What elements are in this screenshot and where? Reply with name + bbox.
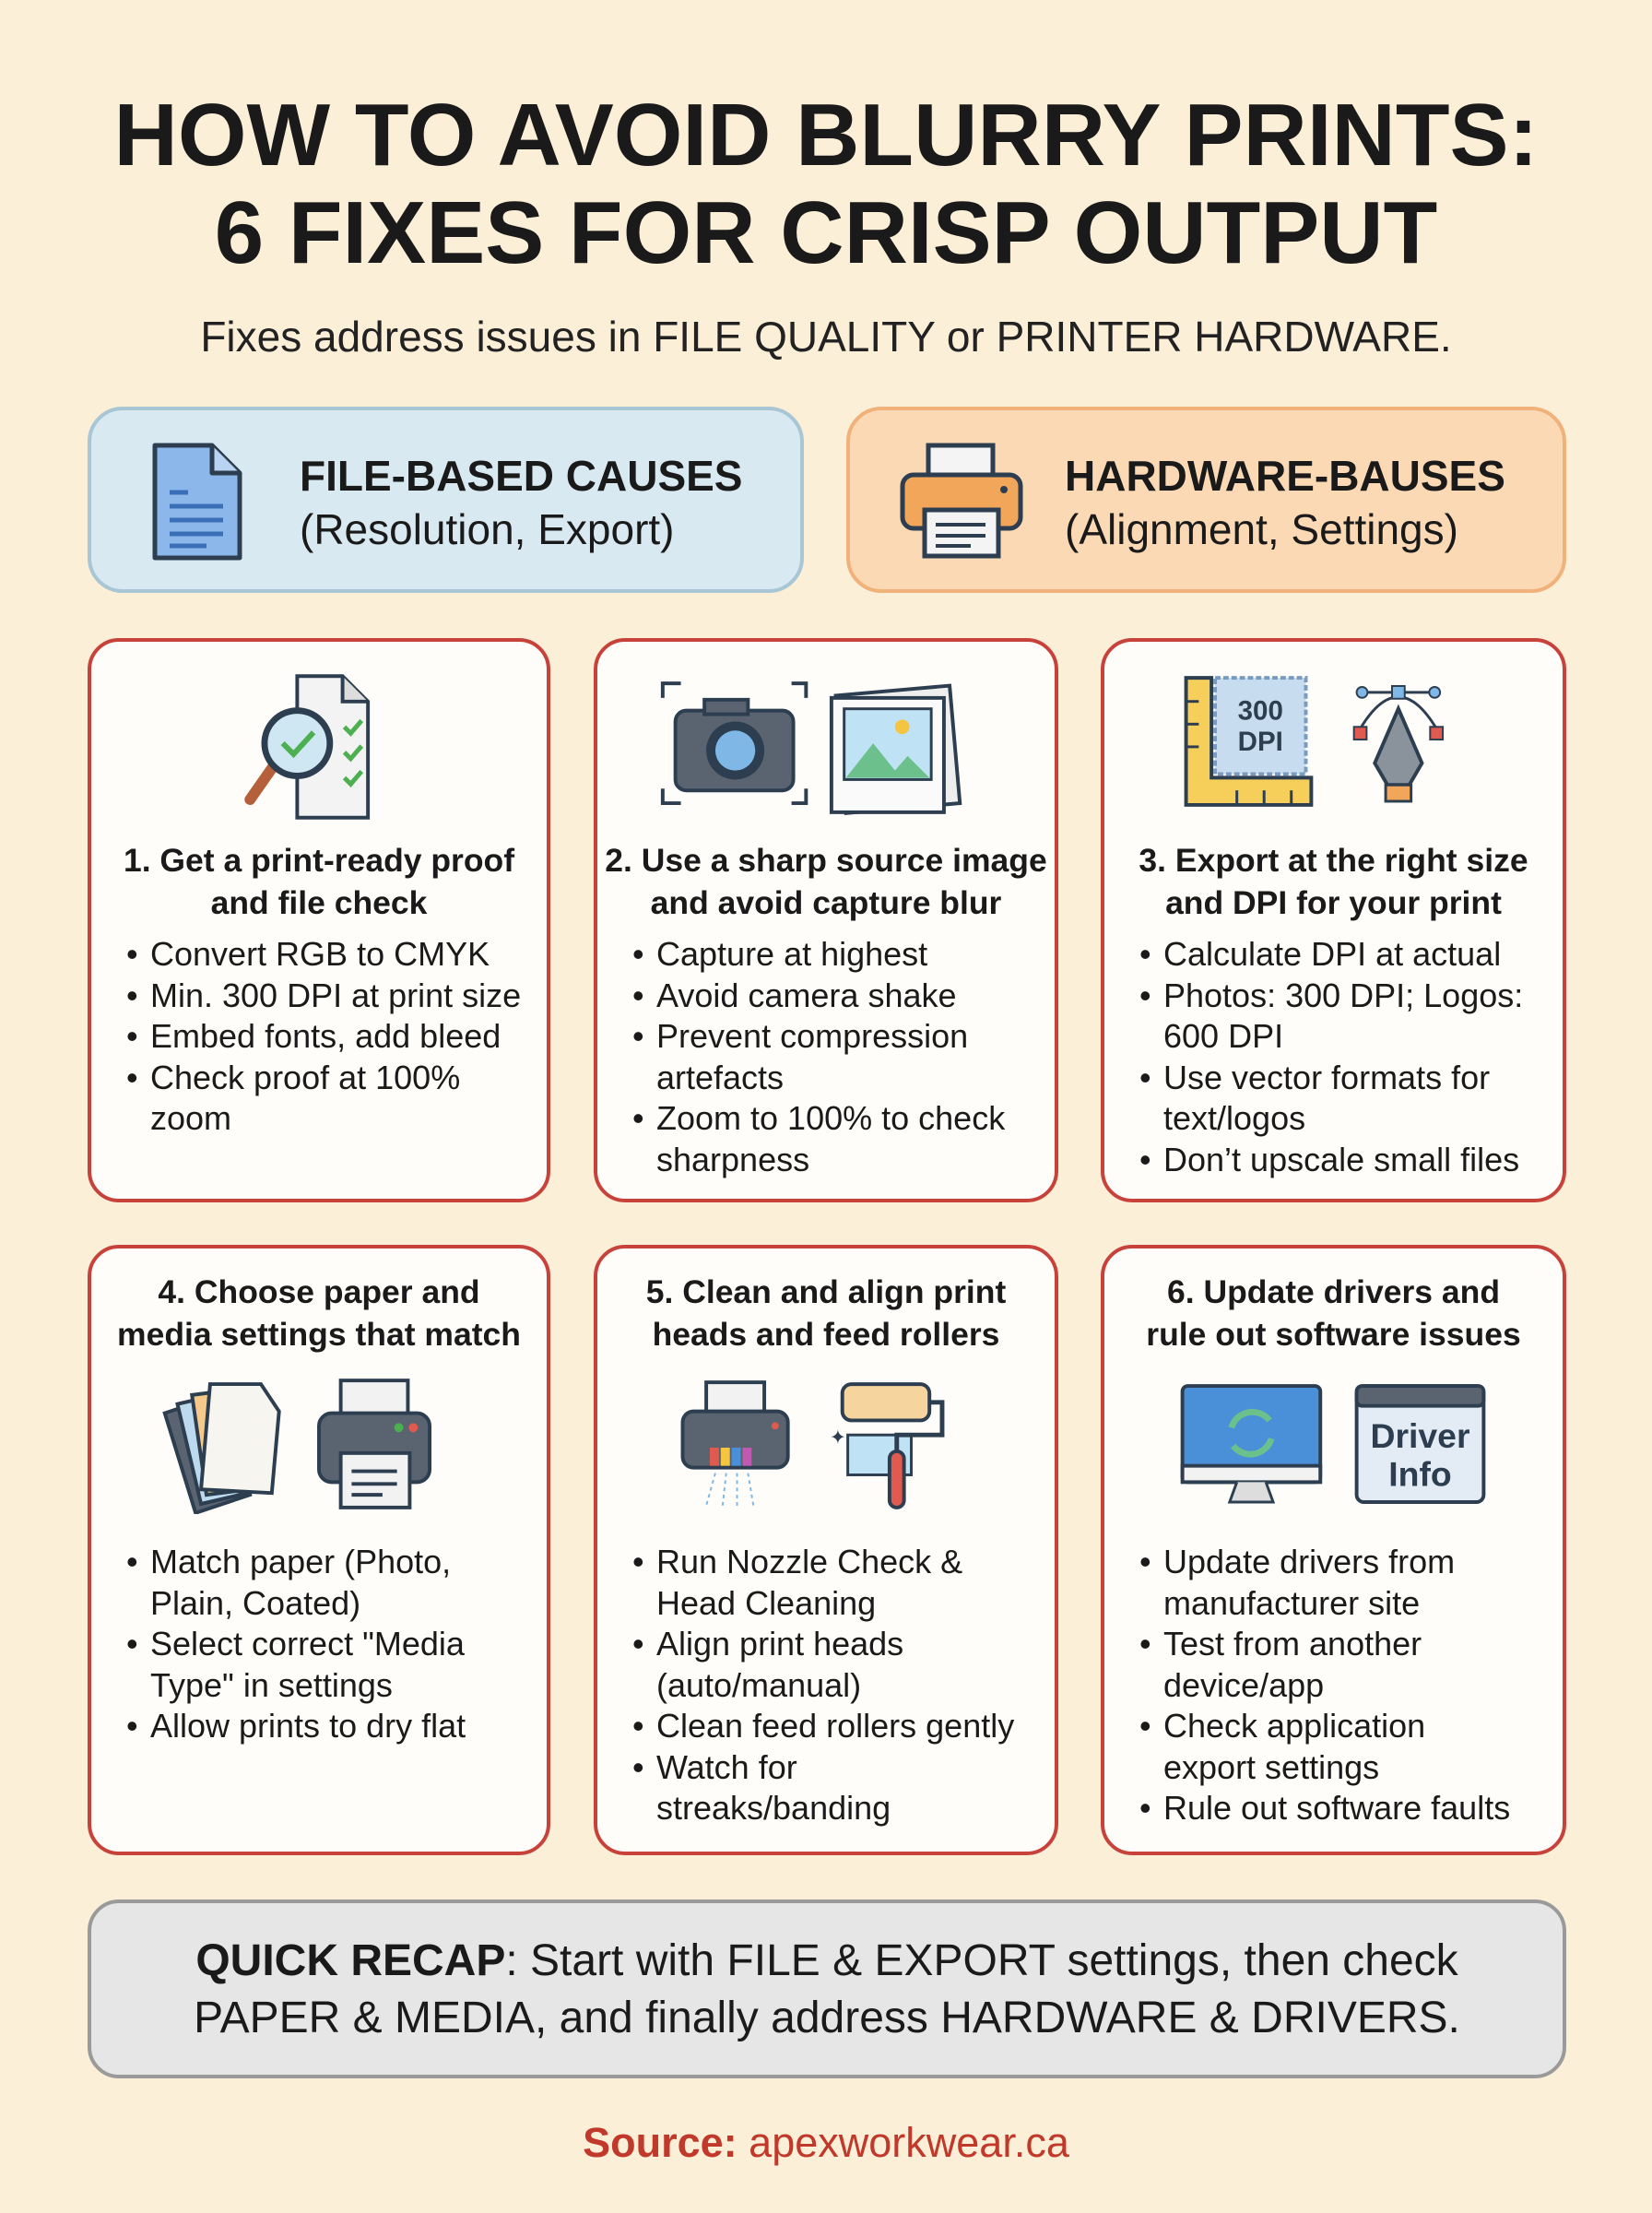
panel: card 1 bbox=[88, 638, 550, 1202]
subheading: (Alignment, Settings) bbox=[1065, 505, 1458, 553]
heading bbox=[1139, 842, 1528, 921]
bullets bbox=[633, 935, 1005, 1178]
bullets bbox=[127, 1543, 466, 1745]
icon: monitor and driver info bbox=[1180, 1384, 1486, 1504]
bullets: Select correct "Media bbox=[150, 1625, 465, 1663]
bullets: (auto/manual) bbox=[656, 1665, 861, 1704]
heading: 2. Use a sharp source image bbox=[605, 842, 1047, 879]
title bbox=[114, 86, 1538, 282]
bullets: Check application bbox=[1163, 1707, 1425, 1745]
heading: 1. Get a print-ready proof bbox=[124, 842, 514, 879]
panel: card 2 bbox=[594, 638, 1058, 1202]
bullets: Use vector formats for bbox=[1163, 1059, 1490, 1095]
title: 6 FIXES FOR CRISP OUTPUT bbox=[215, 183, 1437, 282]
bullets: sharpness bbox=[656, 1140, 809, 1178]
bullets bbox=[127, 935, 521, 1137]
bullets: Clean feed rollers gently bbox=[656, 1707, 1014, 1745]
bullets: Watch for bbox=[656, 1748, 797, 1785]
heading: and file check bbox=[211, 884, 427, 921]
heading bbox=[117, 1273, 521, 1353]
bullets bbox=[633, 1543, 1014, 1827]
bullets: Type" in settings bbox=[150, 1665, 393, 1704]
panel: card 4 bbox=[88, 1245, 550, 1855]
panel: file-based causes bbox=[88, 407, 804, 593]
heading: 5. Clean and align print bbox=[646, 1273, 1006, 1310]
bullets: Allow prints to dry flat bbox=[150, 1707, 466, 1745]
icon: printer heads and roller bbox=[680, 1380, 944, 1509]
bullets: Avoid camera shake bbox=[656, 976, 957, 1014]
title: HOW TO AVOID BLURRY PRINTS: bbox=[114, 86, 1538, 184]
icon: camera and photo bbox=[660, 681, 962, 815]
bullets: Convert RGB to CMYK bbox=[150, 935, 490, 973]
icon: paper stack and printer bbox=[162, 1379, 431, 1514]
bullets: Don’t upscale small files bbox=[1163, 1140, 1519, 1178]
bullets: export settings bbox=[1163, 1748, 1379, 1785]
heading: and avoid capture blur bbox=[651, 884, 1001, 921]
bullets: streaks/banding bbox=[656, 1789, 891, 1827]
heading: FILE-BASED CAUSES bbox=[300, 452, 742, 500]
bullets: zoom bbox=[150, 1099, 231, 1137]
bullets: Zoom to 100% to check bbox=[656, 1099, 1005, 1137]
heading: heads and feed rollers bbox=[653, 1316, 999, 1353]
callout: quick recap: PAPER & MEDIA, and finally address HARDWARE & DRIVERS. bbox=[194, 1994, 1460, 2042]
heading: rule out software issues bbox=[1146, 1316, 1521, 1353]
bullets: Match paper (Photo, bbox=[150, 1543, 451, 1580]
bullets: device/app bbox=[1163, 1665, 1324, 1704]
bullets: Photos: 300 DPI; Logos: bbox=[1163, 976, 1523, 1014]
heading: and DPI for your print bbox=[1165, 884, 1502, 921]
bullets: Plain, Coated) bbox=[150, 1584, 360, 1621]
panel: card 5 bbox=[594, 1245, 1058, 1855]
bullets bbox=[1140, 1543, 1510, 1827]
icon: dpi ruler and pen bbox=[1184, 676, 1444, 807]
callout: quick recap bbox=[88, 1899, 1566, 2078]
bullets: Head Cleaning bbox=[656, 1584, 876, 1621]
heading bbox=[646, 1273, 1006, 1353]
heading: media settings that match bbox=[117, 1316, 521, 1353]
bullets: Capture at highest bbox=[656, 935, 927, 973]
bullets: Min. 300 DPI at print size bbox=[150, 976, 521, 1014]
icon: printer bbox=[900, 443, 1023, 559]
bullets: Run Nozzle Check & bbox=[656, 1543, 962, 1580]
heading: HARDWARE-BAUSES bbox=[1065, 452, 1505, 500]
heading bbox=[1146, 1273, 1521, 1353]
callout: quick recap: QUICK RECAP: Start with FILE & EXPORT settings, then check bbox=[195, 1936, 1458, 1985]
bullets: Embed fonts, add bleed bbox=[150, 1017, 501, 1055]
heading bbox=[605, 842, 1047, 921]
panel: card 6 bbox=[1101, 1245, 1566, 1855]
bullets: Test from another bbox=[1163, 1625, 1422, 1663]
icon: dpi ruler and pen: DPI bbox=[1238, 727, 1283, 757]
bullets: manufacturer site bbox=[1163, 1584, 1420, 1621]
panel: hardware causes bbox=[846, 407, 1566, 593]
bullets: Rule out software faults bbox=[1163, 1789, 1510, 1827]
subheading: (Resolution, Export) bbox=[300, 505, 675, 553]
heading bbox=[124, 842, 514, 921]
heading: 3. Export at the right size bbox=[1139, 842, 1528, 879]
bullets: Update drivers from bbox=[1163, 1543, 1455, 1580]
icon: monitor and driver info: Info bbox=[1388, 1454, 1452, 1493]
bullets: text/logos bbox=[1163, 1099, 1305, 1137]
heading: 4. Choose paper and bbox=[158, 1273, 480, 1310]
bullets: 600 DPI bbox=[1163, 1017, 1283, 1055]
heading: 6. Update drivers and bbox=[1167, 1273, 1500, 1310]
icon: magnifier checklist bbox=[244, 674, 371, 820]
bullets: Calculate DPI at actual bbox=[1163, 935, 1501, 973]
source: Source: apexworkwear.ca bbox=[583, 2119, 1069, 2166]
panel: card 3 bbox=[1101, 638, 1566, 1202]
bullets: Check proof at 100% bbox=[150, 1059, 460, 1095]
bullets: Prevent compression bbox=[656, 1017, 968, 1055]
icon: dpi ruler and pen: 300 bbox=[1238, 695, 1283, 726]
bullets bbox=[1140, 935, 1523, 1178]
icon: monitor and driver info: Driver bbox=[1370, 1416, 1470, 1455]
bullets: artefacts bbox=[656, 1059, 784, 1095]
icon: printer heads and roller: ✦ bbox=[830, 1426, 846, 1449]
icon: document bbox=[153, 443, 242, 561]
bullets: Align print heads bbox=[656, 1625, 903, 1663]
subtitle: Fixes address issues in FILE QUALITY or PRINTER HARDWARE. bbox=[200, 313, 1452, 361]
